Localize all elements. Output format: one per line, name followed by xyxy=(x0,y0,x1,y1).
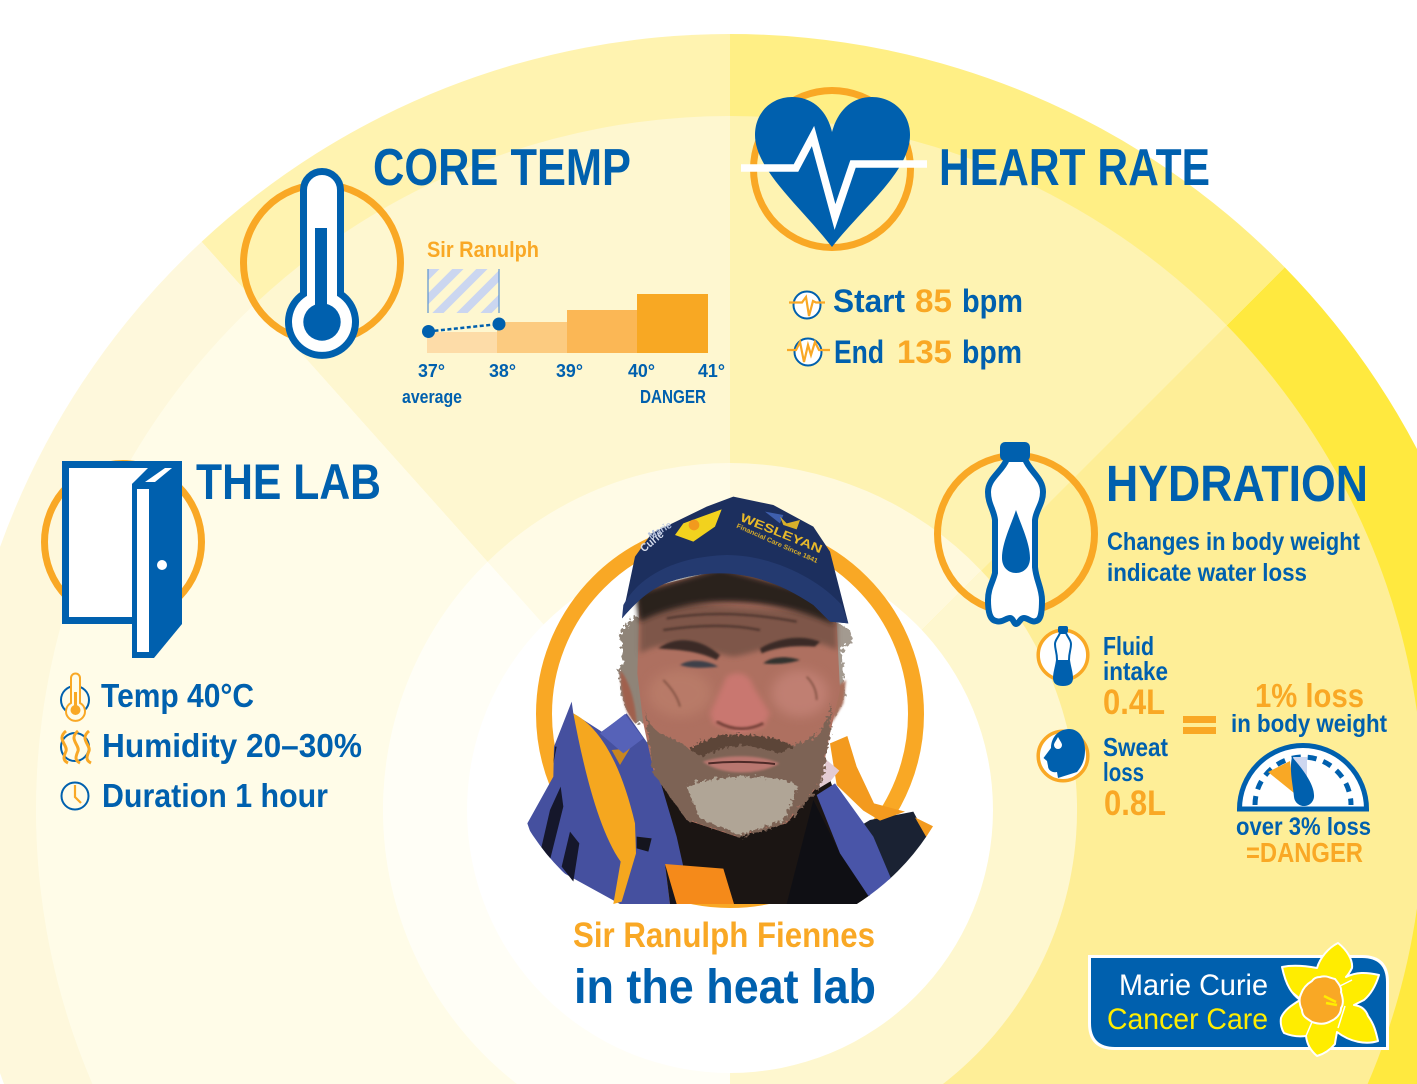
text: body weight note: indicate water loss xyxy=(1107,559,1307,587)
chart: temperature steps: Sir Ranulph xyxy=(427,237,539,262)
text: end bpm: bpm xyxy=(962,334,1022,370)
text: fluid intake xyxy=(1103,631,1168,722)
photo: Sir Ranulph in cap and jacket: Financial Care Since 1841 xyxy=(735,523,819,565)
text: temp: Temp 40°C xyxy=(101,677,254,714)
logo: Marie Curie Cancer Care: Marie Curie xyxy=(1119,969,1268,1002)
caption: in the heat lab: in the heat lab xyxy=(574,961,876,1014)
panel: the lab xyxy=(44,454,381,814)
panel: hydration xyxy=(938,442,1388,868)
sector: right middle xyxy=(730,325,1417,1084)
text: fluid intake: Fluid xyxy=(1103,631,1154,661)
text: sweat loss xyxy=(1103,732,1168,823)
chart: temperature steps: 38° xyxy=(489,361,516,381)
panel: heart rate xyxy=(741,90,1210,370)
text: start bpm: bpm xyxy=(962,283,1023,319)
panel: portrait xyxy=(527,497,937,1014)
text: body weight note: Changes in body weight xyxy=(1107,528,1361,556)
text: danger note: over 3% loss xyxy=(1236,813,1371,841)
text: danger note xyxy=(1236,813,1371,868)
logo: Marie Curie Cancer Care: Cancer Care xyxy=(1107,1003,1268,1036)
text: start bpm xyxy=(833,283,1023,319)
chart: temperature steps xyxy=(402,237,725,407)
icon: fluid intake bottle xyxy=(1038,626,1088,685)
icon: thermometer xyxy=(244,172,400,355)
icon: clock xyxy=(62,782,88,810)
photo: face xyxy=(637,570,840,837)
sector: top right outer xyxy=(730,34,1285,822)
text: body weight note xyxy=(1107,528,1361,587)
chart: temperature steps: average xyxy=(402,387,462,407)
chart: temperature steps: 37° xyxy=(418,361,445,381)
sector: right inner xyxy=(730,571,1077,1084)
chart: temperature steps: 41° xyxy=(698,361,725,381)
text: end bpm xyxy=(834,334,1022,370)
chart: temperature steps: 40° xyxy=(628,361,655,381)
panel: core temp xyxy=(244,139,725,407)
photo: cap xyxy=(622,497,848,623)
equals sign xyxy=(1183,716,1216,734)
photo: beard and mouth xyxy=(645,703,832,837)
text: sweat loss: loss xyxy=(1103,757,1144,787)
text: one percent loss xyxy=(1231,677,1388,738)
heading: core temp: CORE TEMP xyxy=(373,139,631,197)
photo: Sir Ranulph in cap and jacket: Marie xyxy=(647,520,674,542)
icon: door xyxy=(44,461,202,658)
text: end bpm: 135 xyxy=(897,334,952,370)
chart: temperature steps: DANGER xyxy=(640,387,706,407)
text: fluid intake: intake xyxy=(1103,656,1168,686)
icon: water bottle xyxy=(938,442,1094,624)
sector: right outer xyxy=(730,267,1417,1084)
chart: temperature steps: 39° xyxy=(556,361,583,381)
photo: cap badges xyxy=(675,509,722,542)
text: start bpm: 85 xyxy=(915,283,952,319)
logo: Marie Curie Cancer Care xyxy=(1088,943,1389,1056)
text: humidity: Humidity 20–30% xyxy=(102,727,362,764)
heading: the lab: THE LAB xyxy=(196,454,381,510)
photo: brows and eyes xyxy=(658,640,720,660)
centre white disc xyxy=(467,547,993,1073)
text: sweat loss: Sweat xyxy=(1103,732,1168,762)
text: one percent loss: in body weight xyxy=(1231,710,1388,738)
icon: slow pulse xyxy=(789,292,825,318)
sector: left middle xyxy=(36,303,730,1084)
text: danger note: =DANGER xyxy=(1246,837,1363,868)
heading: hydration: HYDRATION xyxy=(1106,455,1368,512)
text: end bpm: End xyxy=(834,334,884,370)
icon: heart with pulse xyxy=(741,90,927,248)
icon: daffodil xyxy=(1281,943,1379,1056)
icon: humidity waves xyxy=(61,731,91,763)
caption: name: Sir Ranulph Fiennes xyxy=(573,916,875,955)
text: fluid intake: 0.4L xyxy=(1103,683,1165,722)
icon: head with sweat drop xyxy=(1038,729,1088,781)
heading: heart rate: HEART RATE xyxy=(939,139,1210,197)
text: one percent loss: 1% loss xyxy=(1255,677,1364,714)
photo: Sir Ranulph in cap and jacket xyxy=(527,497,937,904)
icon: danger gauge xyxy=(1240,746,1366,809)
text: duration: Duration 1 hour xyxy=(102,777,328,814)
icon: fast pulse xyxy=(787,338,830,366)
ring behind portrait xyxy=(544,528,916,900)
photo: Sir Ranulph in cap and jacket: Curie xyxy=(638,529,666,555)
icon: small thermometer xyxy=(61,674,89,721)
sector: top right inner xyxy=(730,463,981,822)
sector: top right middle xyxy=(730,116,1227,822)
text: sweat loss: 0.8L xyxy=(1104,784,1166,823)
sector: left inner xyxy=(383,562,730,1084)
sector: left outer xyxy=(0,242,730,1084)
sector: top left middle xyxy=(256,116,730,833)
text: start bpm: Start xyxy=(833,283,905,319)
photo: Sir Ranulph in cap and jacket: WESLEYAN xyxy=(738,510,824,556)
sector: top left inner xyxy=(488,463,730,833)
sector: top left outer xyxy=(202,34,730,833)
photo: hair and ears xyxy=(618,615,647,723)
